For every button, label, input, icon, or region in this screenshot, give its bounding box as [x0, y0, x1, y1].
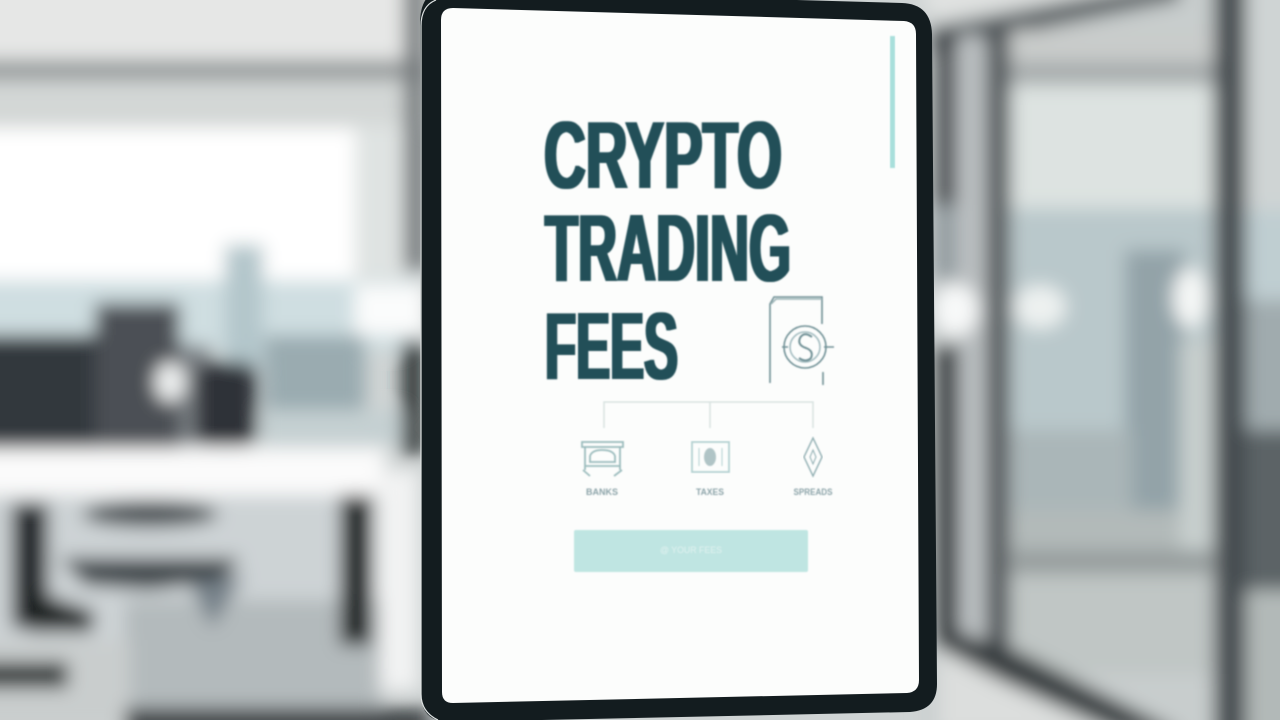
title: FEES [545, 293, 678, 400]
tablet screen [441, 8, 919, 703]
title: TRADING [545, 195, 791, 302]
icon: fee category 1 [582, 442, 623, 476]
frame edge highlight [421, 0, 438, 720]
right office scene [920, 0, 1280, 720]
call-to-action button [574, 530, 808, 572]
tablet device [420, 0, 937, 720]
connector lines [604, 402, 813, 428]
title: CRYPTO [544, 102, 782, 209]
label: fee category 3: SPREADS [794, 487, 832, 497]
left office scene [0, 0, 430, 720]
label: fee category 2: TAXES [696, 487, 724, 497]
title [544, 102, 791, 400]
call-to-action button: @ YOUR FEES [660, 545, 722, 555]
label: fee category 1: BANKS [586, 487, 618, 497]
icon: fee category 3 [804, 438, 822, 476]
icon: wallet with coin [770, 297, 834, 385]
tablet frame [420, 0, 937, 720]
icon: fee category 2 [692, 442, 729, 472]
accent bar [890, 36, 895, 168]
